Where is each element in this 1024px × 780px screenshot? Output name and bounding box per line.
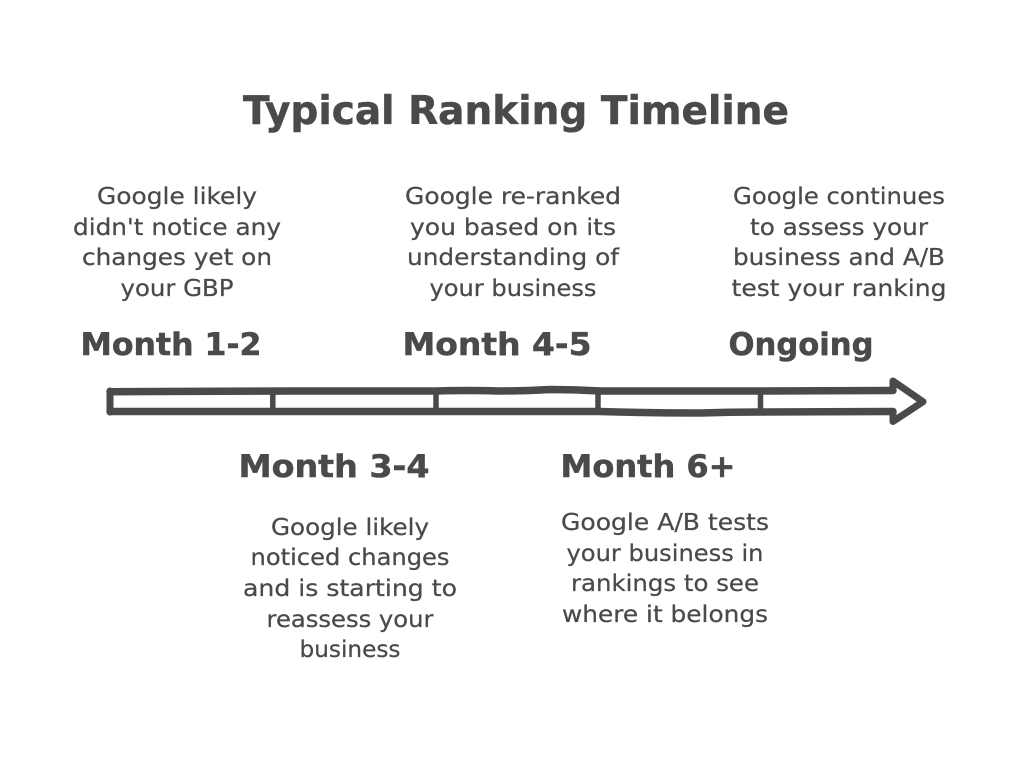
text block: month 4-5 description <box>405 184 621 302</box>
text block: month 6+ description: your business in <box>566 541 764 567</box>
text block: month 4-5 description: your business <box>430 276 596 302</box>
heading: month 3-4: Month 3-4 <box>238 449 430 485</box>
text block: ongoing description: to assess your <box>750 215 929 241</box>
text block: month 1-2 description: didn't notice any <box>73 215 281 241</box>
text block: month 1-2 description: Google likely <box>97 184 257 210</box>
text block: month 1-2 description: your GBP <box>120 276 234 302</box>
text block: month 3-4 description: business <box>300 637 400 663</box>
text block: ongoing description <box>732 184 946 302</box>
heading: ongoing: Ongoing <box>728 327 874 363</box>
text block: ongoing description: test your ranking <box>732 276 946 302</box>
text block: month 1-2 description: changes yet on <box>82 245 272 271</box>
text block: month 6+ description: where it belongs <box>562 602 768 628</box>
text block: month 4-5 description: Google re-ranked <box>405 184 621 210</box>
text block: month 3-4 description: and is starting to <box>243 576 457 602</box>
text block: month 4-5 description: you based on its <box>410 215 616 241</box>
heading: month 6+: Month 6+ <box>560 449 736 485</box>
text block: month 6+ description <box>561 510 769 628</box>
text block: month 1-2 description <box>73 184 281 302</box>
timeline arrow <box>110 381 923 422</box>
tick marks <box>273 393 760 410</box>
text block: month 3-4 description <box>243 515 457 663</box>
heading: month 4-5: Month 4-5 <box>402 327 592 363</box>
text block: month 3-4 description: noticed changes <box>250 545 450 571</box>
text block: month 4-5 description: understanding of <box>407 245 620 271</box>
text block: ongoing description: business and A/B <box>733 245 945 271</box>
title: Typical Ranking Timeline <box>243 89 789 134</box>
text block: ongoing description: Google continues <box>733 184 945 210</box>
text block: month 3-4 description: Google likely <box>271 515 429 541</box>
heading: month 1-2: Month 1-2 <box>80 327 262 363</box>
text block: month 6+ description: rankings to see <box>571 571 759 597</box>
text block: month 3-4 description: reassess your <box>266 607 434 633</box>
text block: month 6+ description: Google A/B tests <box>561 510 769 536</box>
